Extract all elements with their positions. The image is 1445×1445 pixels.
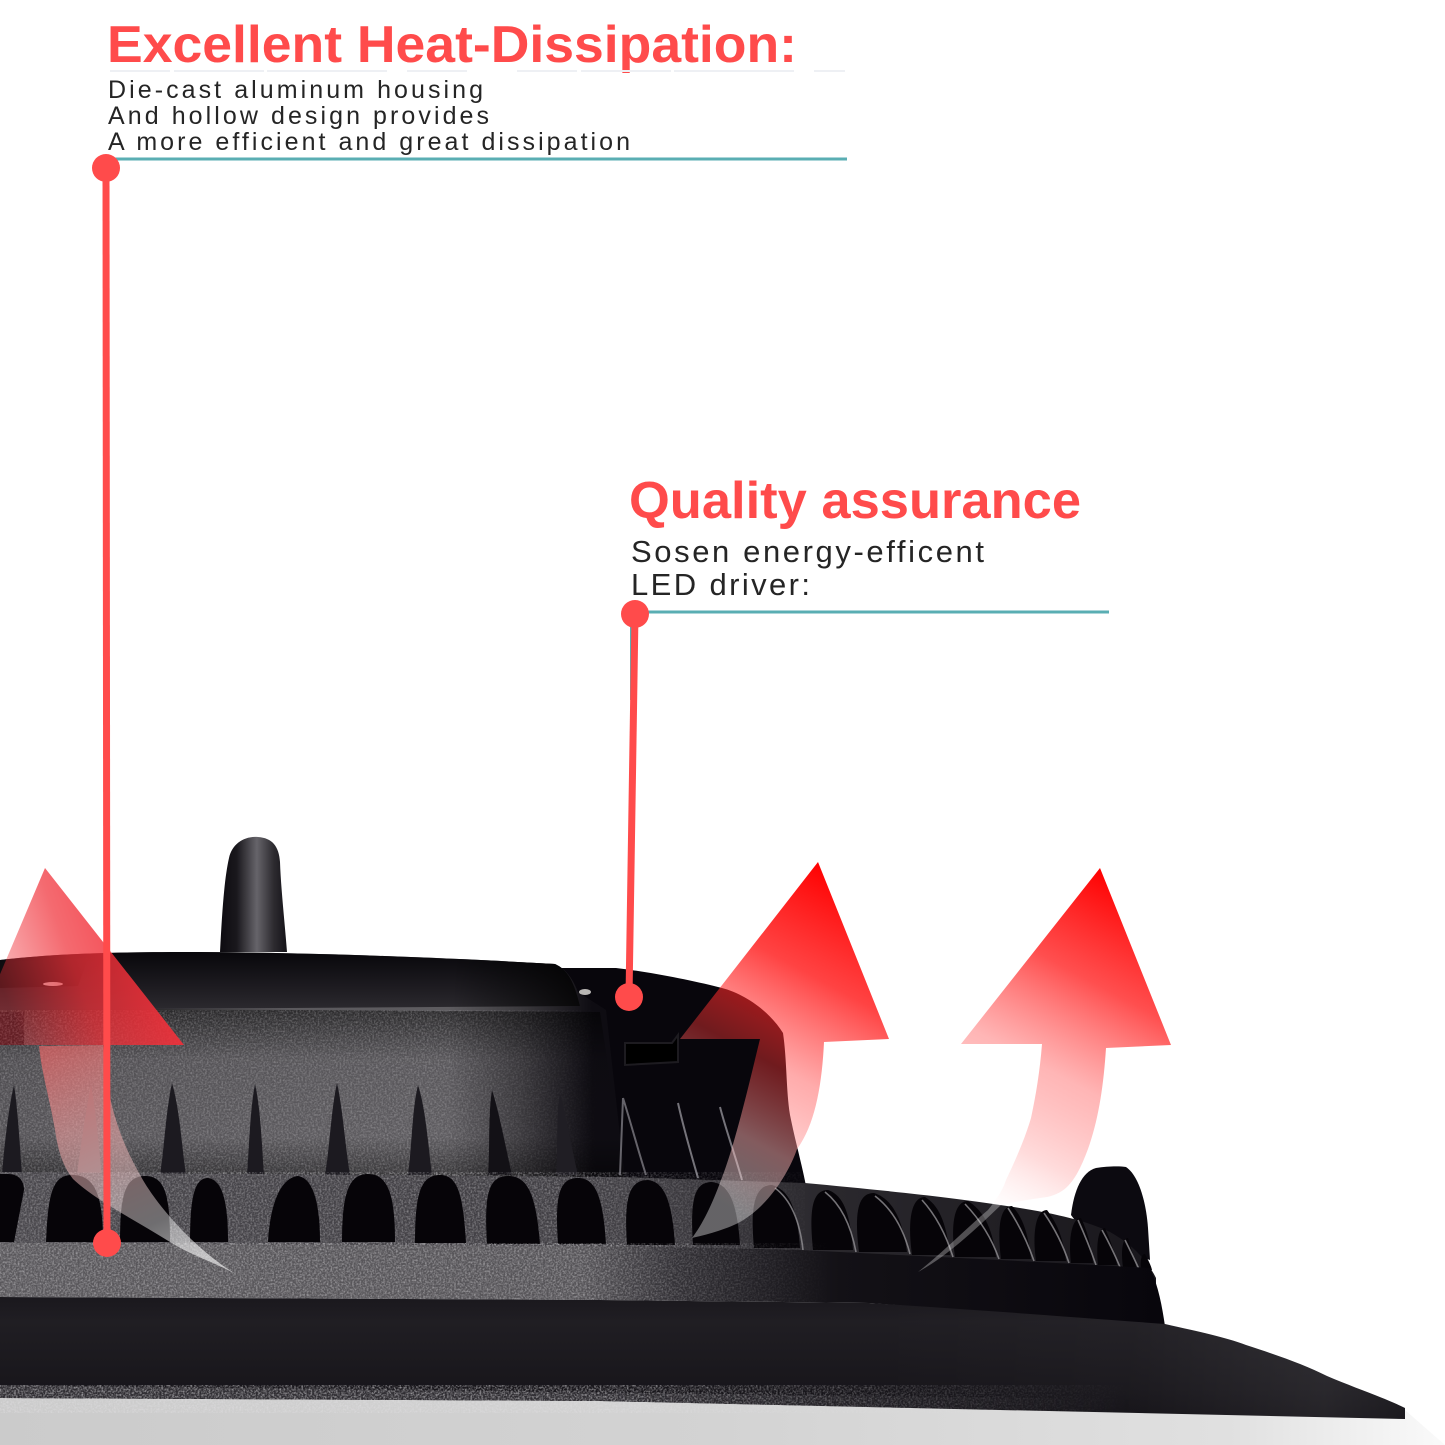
strip casting texture <box>0 1385 1130 1413</box>
leader start dot <box>621 600 649 628</box>
textured bottom strip <box>0 1385 1061 1412</box>
description line 1: Sosen energy-efficent <box>631 534 984 569</box>
heat arrow far left <box>0 868 243 1278</box>
cylinder shading <box>0 1008 625 1180</box>
arrow head <box>0 868 184 1045</box>
heading: quality assurance: Quality assurance <box>629 472 1081 530</box>
driver window detail <box>625 1035 678 1065</box>
ground shadow under lamp <box>0 1390 1445 1445</box>
dome right highlight <box>869 1303 1405 1419</box>
callout: heat dissipation <box>92 16 847 1257</box>
driver screw highlight <box>579 989 591 995</box>
lamp hanging hook, top <box>220 837 287 952</box>
cap band fade <box>0 952 580 1010</box>
ring band casting texture <box>0 1243 830 1303</box>
fin windows <box>0 1174 1152 1270</box>
fin light edges <box>775 1188 1139 1269</box>
casting texture on cylinder <box>0 1010 625 1180</box>
fin casting texture <box>0 1172 800 1250</box>
cap left block <box>0 958 88 988</box>
cooling spikes <box>2 1083 742 1180</box>
leader line <box>629 614 635 997</box>
finned ring base <box>0 1172 1156 1285</box>
ghost text residue <box>110 70 845 72</box>
description line 3: A more efficient and great dissipation <box>108 128 630 156</box>
heading: excellent heat-dissipation: Excellent Heat-Dissipation: <box>107 16 797 74</box>
teal divider <box>635 610 1109 614</box>
leader end dot <box>615 983 643 1011</box>
heat arrow right <box>918 868 1171 1272</box>
description line 2: LED driver: <box>631 567 810 602</box>
arrow shaft <box>39 1045 243 1278</box>
leader end dot <box>93 1229 121 1257</box>
cylinder cap band <box>0 952 580 1010</box>
upper cylinder housing <box>0 952 625 1180</box>
lamp dome lower body <box>0 1297 1405 1419</box>
description line 2: And hollow design provides <box>108 102 489 130</box>
left dark block <box>0 1012 24 1045</box>
lamp driver housing behind <box>560 968 806 1186</box>
heat arrow middle <box>680 862 889 1238</box>
cap left block highlight <box>43 982 63 986</box>
callout: quality assurance <box>615 472 1109 1011</box>
lamp hanging hook, right <box>1071 1166 1150 1260</box>
leader line <box>106 168 107 1243</box>
faint teal drop line <box>630 612 632 700</box>
leader start dot <box>92 154 120 182</box>
textured ring band <box>0 1243 1165 1326</box>
description line 1: Die-cast aluminum housing <box>108 76 483 104</box>
teal divider <box>106 158 847 160</box>
high bay lamp <box>0 837 1405 1419</box>
